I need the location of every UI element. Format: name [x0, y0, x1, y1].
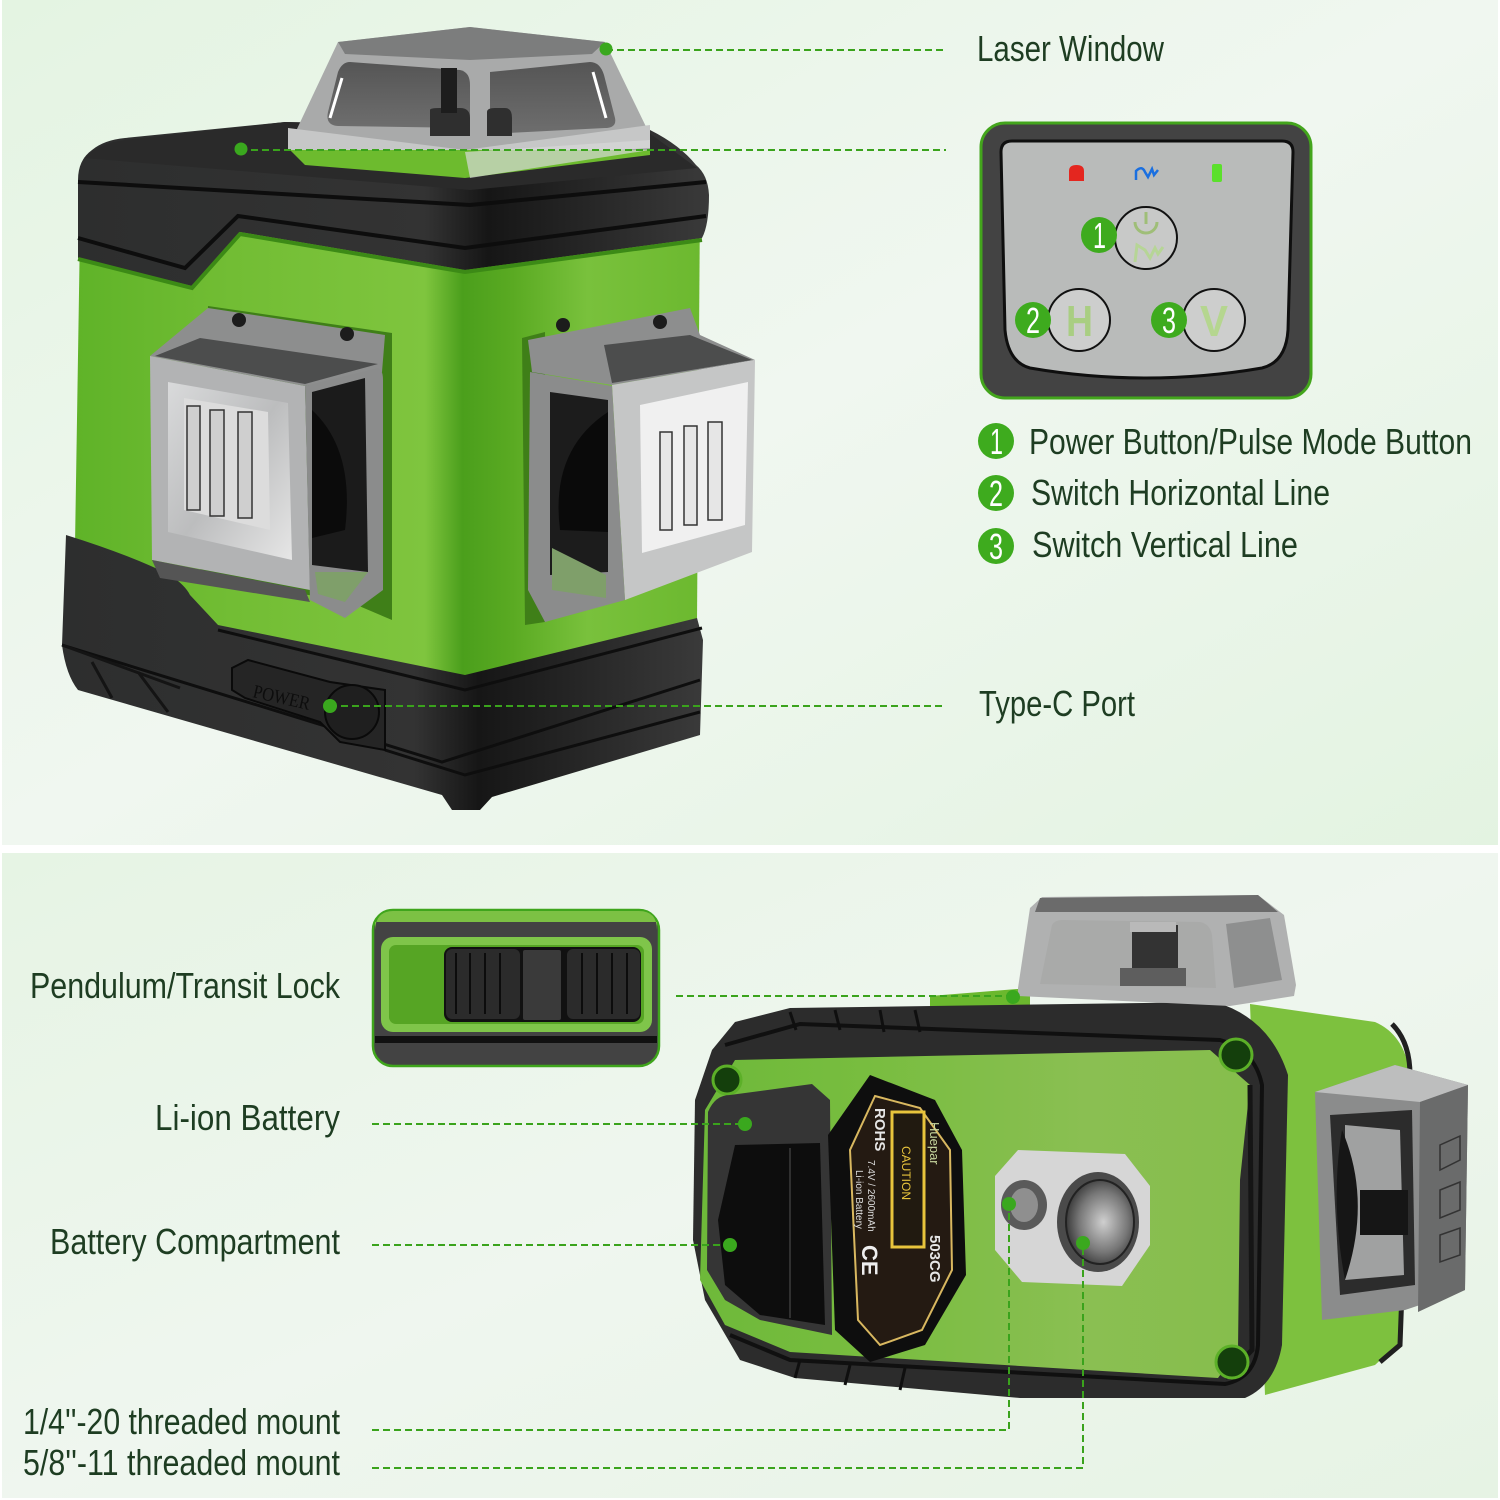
- corner holes: [1220, 1039, 1252, 1071]
- green body: [75, 200, 700, 680]
- legend item 3: [978, 524, 1298, 567]
- mount plate: [995, 1150, 1150, 1286]
- badge 3: 3: [1162, 300, 1176, 341]
- green wedge behind head: [930, 988, 1030, 1010]
- battery label: Huepar: [927, 1122, 942, 1165]
- battery label: 503CG: [926, 1235, 943, 1283]
- legend item 3: Switch Vertical Line: [1032, 524, 1298, 565]
- control panel: [981, 123, 1311, 398]
- battery label: 7.4V / 2600mAh: [865, 1160, 876, 1232]
- LED pulse: [1136, 168, 1158, 180]
- battery label: Li-ion Battery: [853, 1170, 864, 1229]
- badge 2: [1015, 300, 1051, 341]
- black top cap: [78, 122, 709, 286]
- left laser module: [150, 306, 392, 620]
- pendulum lock inset: [373, 910, 659, 1066]
- label: Laser Window: Laser Window: [977, 28, 1165, 69]
- legend item 2: 2: [989, 473, 1003, 514]
- legend item 3: 3: [989, 526, 1003, 567]
- right laser module: [522, 308, 755, 625]
- LED battery: [1212, 164, 1222, 182]
- laser head rear: [1018, 895, 1296, 1006]
- laser head: [288, 27, 650, 178]
- badge 2: 2: [1026, 300, 1040, 341]
- badge 1: [1081, 215, 1117, 256]
- leader lines top: [234, 42, 946, 713]
- battery block: [707, 1084, 832, 1335]
- badge 1: 1: [1093, 215, 1106, 256]
- leader lines bottom: [372, 990, 1090, 1468]
- LED lock: [1069, 165, 1084, 181]
- battery label: CE: [857, 1245, 882, 1276]
- battery label: ROHS: [871, 1108, 888, 1151]
- battery label: CAUTION: [899, 1146, 913, 1200]
- legend item 2: Switch Horizontal Line: [1031, 472, 1330, 513]
- battery label: [828, 1075, 966, 1362]
- label: 5/8 inch threaded mount: 5/8''-11 threaded mount: [23, 1442, 340, 1483]
- panel: background bottom: [2, 853, 1498, 1498]
- black frame: [693, 1002, 1288, 1398]
- button V: [1183, 289, 1245, 351]
- badge 3: [1151, 300, 1187, 341]
- green side body: [1250, 1004, 1410, 1395]
- label: Li-ion Battery: Li-ion Battery: [155, 1097, 340, 1138]
- panel: background top: [2, 0, 1498, 845]
- label: 1/4 inch threaded mount: 1/4''-20 threaded mount: [23, 1401, 340, 1442]
- device: top laser level: [62, 27, 755, 810]
- right laser module: [1315, 1065, 1468, 1320]
- green back face: [700, 1050, 1250, 1378]
- device: bottom laser level: [693, 895, 1468, 1398]
- power port cover: POWER: [251, 681, 312, 715]
- base feet ridges: [62, 645, 180, 712]
- label: Type-C Port: Type-C Port: [979, 683, 1135, 724]
- legend item 1: 1: [990, 421, 1003, 462]
- power port cover: [232, 660, 385, 750]
- label: Battery Compartment: Battery Compartment: [50, 1221, 340, 1262]
- base black housing: [62, 535, 703, 810]
- button H: H: [1066, 297, 1093, 346]
- label: Pendulum/Transit Lock: Pendulum/Transit Lock: [30, 965, 341, 1006]
- button power: [1115, 207, 1177, 269]
- button V: V: [1200, 297, 1229, 346]
- button H: [1048, 289, 1110, 351]
